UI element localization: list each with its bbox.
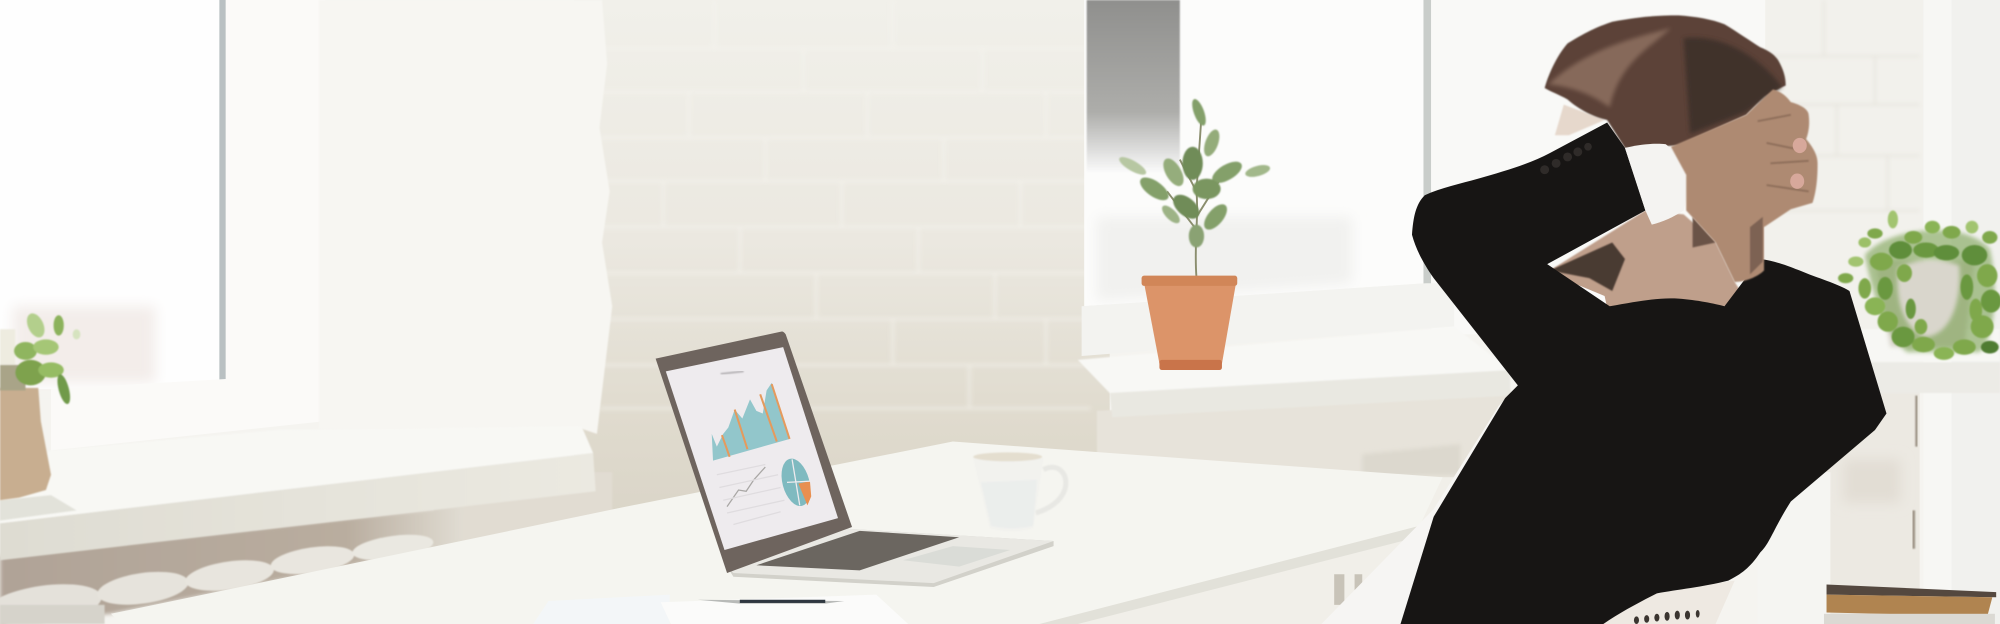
dark hair shadow xyxy=(1684,38,1782,134)
table lower area and leg xyxy=(1040,477,1505,624)
right brick wall xyxy=(1765,0,1923,334)
handle xyxy=(1036,467,1066,513)
front paper xyxy=(661,595,908,624)
radiator behind desk xyxy=(1362,444,1460,477)
chart gridlines xyxy=(717,464,784,524)
right plant in pot xyxy=(1838,211,2000,360)
far right column xyxy=(1923,0,2000,624)
pen xyxy=(698,600,844,604)
finger creases xyxy=(1758,115,1809,191)
chair holes xyxy=(1634,610,1700,624)
left white-washed wall with rough edge xyxy=(319,0,612,434)
brown wall under left sill xyxy=(0,505,462,624)
pot xyxy=(1144,283,1236,364)
shirt cuff xyxy=(1625,144,1687,225)
right window sill xyxy=(1857,329,2000,393)
body xyxy=(973,458,1043,531)
pot xyxy=(1875,260,1974,347)
collar xyxy=(1724,299,1770,309)
right window pane xyxy=(1431,0,1765,334)
hair highlights xyxy=(1548,28,1671,107)
laptop base xyxy=(727,528,1054,587)
white shirt xyxy=(1321,385,1518,624)
pie orange slice xyxy=(798,481,811,505)
lid xyxy=(656,331,852,573)
pie dividers xyxy=(787,459,811,505)
pot base xyxy=(1159,360,1222,370)
area chart xyxy=(712,383,790,461)
central brick wall xyxy=(574,0,1110,536)
chart orange bars xyxy=(722,384,790,457)
left plant in woven basket xyxy=(0,311,80,500)
hair xyxy=(1545,15,1786,148)
screen xyxy=(666,347,838,550)
stems xyxy=(1167,115,1224,277)
clasped hands xyxy=(1671,89,1818,282)
pale pot detail xyxy=(0,329,15,365)
fingernail upper xyxy=(1793,138,1807,153)
lower book xyxy=(1824,614,1995,624)
wall below central sill xyxy=(1097,389,1510,485)
neck and head skin xyxy=(1550,211,1750,309)
black jacket xyxy=(1401,123,1886,624)
left window frame xyxy=(51,0,325,450)
shirt collar gap xyxy=(1574,283,1607,308)
leaves xyxy=(1838,211,2000,360)
finger shading xyxy=(1750,217,1763,274)
pot rim xyxy=(1142,276,1237,286)
top book cover xyxy=(1827,584,1996,597)
foliage mass xyxy=(1865,230,1995,352)
papers on desk xyxy=(533,595,908,624)
chart title xyxy=(721,371,744,374)
central window sill xyxy=(1078,327,1510,417)
leaves xyxy=(0,311,80,405)
pie chart xyxy=(777,455,815,509)
keyboard xyxy=(756,531,959,570)
left window sill xyxy=(0,426,596,560)
central window frame xyxy=(1082,283,1454,356)
rim xyxy=(973,452,1042,461)
central window glass xyxy=(1084,0,1431,306)
wall below left sill xyxy=(434,472,612,549)
leaves xyxy=(1117,97,1271,248)
left paper xyxy=(533,595,670,624)
desk surface xyxy=(111,442,1443,624)
man xyxy=(1401,15,1886,624)
stacked books xyxy=(1824,584,1996,624)
shaded band xyxy=(981,480,1037,528)
line chart xyxy=(727,467,765,507)
coffee mug xyxy=(973,452,1066,531)
basket xyxy=(0,388,51,500)
left window glass xyxy=(0,0,226,389)
neck hair xyxy=(1550,242,1625,291)
fingernail lower xyxy=(1790,174,1804,189)
sleeve buttons xyxy=(1540,143,1592,174)
face sliver xyxy=(1555,105,1605,135)
laptop xyxy=(656,331,1054,587)
central plant in terracotta pot xyxy=(1117,97,1271,370)
top book pages xyxy=(1827,595,1992,616)
office chair back xyxy=(1594,581,1735,624)
trackpad xyxy=(903,546,1010,567)
deck xyxy=(727,528,1054,583)
white pillar xyxy=(1758,472,1830,624)
lower right brick wall xyxy=(1792,389,1920,624)
sideburn hair xyxy=(1693,217,1716,248)
radiator xyxy=(0,530,435,624)
